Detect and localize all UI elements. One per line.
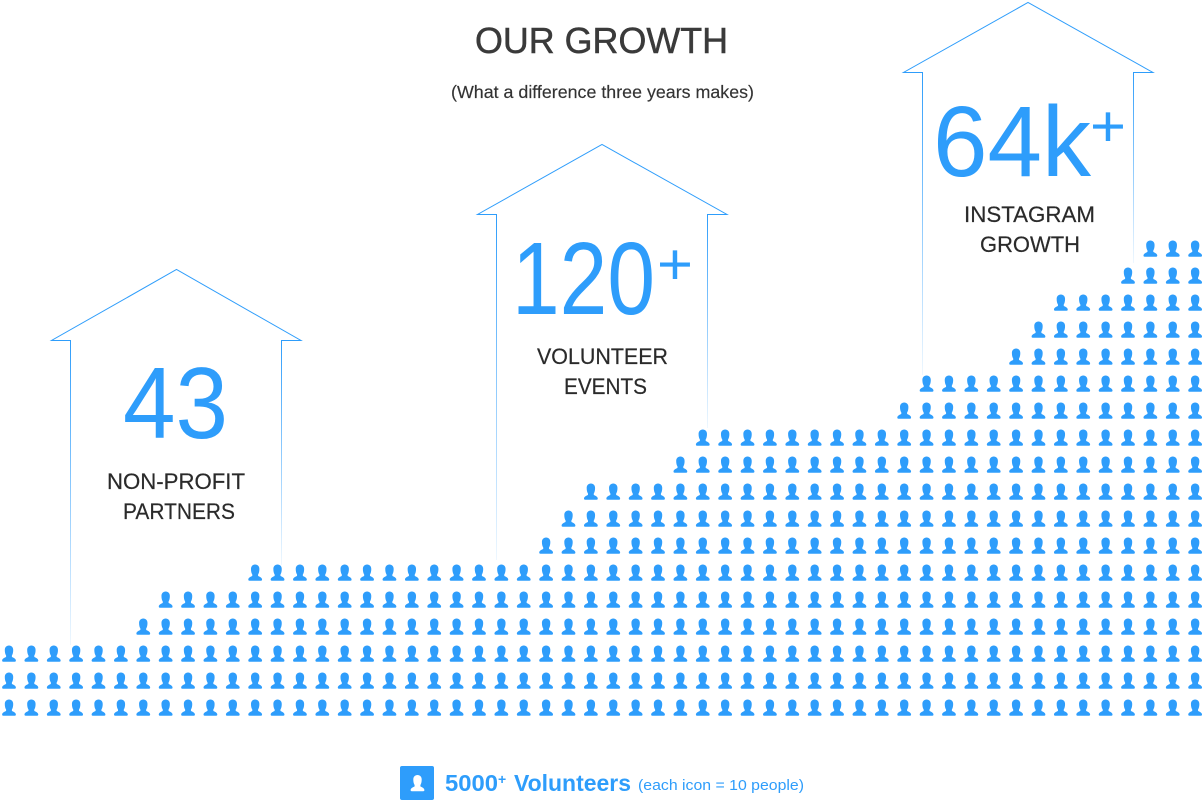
arrow outline 2	[478, 144, 727, 560]
label instagram growth	[964, 202, 1095, 257]
subtitle: (What a difference three years makes)	[451, 82, 754, 102]
arrow outline 1	[52, 270, 301, 645]
label volunteer events	[537, 344, 668, 399]
arrow panel: instagram growth	[904, 2, 1153, 375]
label volunteer events: EVENTS	[564, 374, 647, 399]
number 64k+: +	[1090, 94, 1126, 159]
arrow outline 3	[904, 2, 1153, 375]
label non-profit partners: NON-PROFIT	[107, 469, 245, 494]
number 43: 43	[123, 348, 228, 460]
legend text: (each icon = 10 people)	[638, 777, 804, 794]
number 64k+: 64k	[933, 86, 1092, 198]
label non-profit partners: PARTNERS	[123, 499, 235, 524]
label volunteer events: VOLUNTEER	[537, 344, 668, 369]
label instagram growth: INSTAGRAM	[964, 202, 1095, 227]
label instagram growth: GROWTH	[980, 232, 1080, 257]
legend text: Volunteers	[514, 770, 631, 796]
legend	[400, 766, 804, 800]
number 120+: 120	[512, 221, 655, 336]
legend text	[445, 770, 804, 796]
legend text: 5000	[445, 770, 498, 796]
label non-profit partners	[107, 469, 245, 524]
arrow panel: non-profit partners	[52, 270, 301, 645]
volunteer icon staircase chart	[2, 240, 1202, 716]
arrow panel: volunteer events	[478, 144, 727, 560]
legend text: +	[498, 771, 506, 787]
icon: person in blue square	[400, 766, 434, 800]
number 120+: +	[657, 232, 693, 297]
title: OUR GROWTH	[475, 20, 728, 61]
